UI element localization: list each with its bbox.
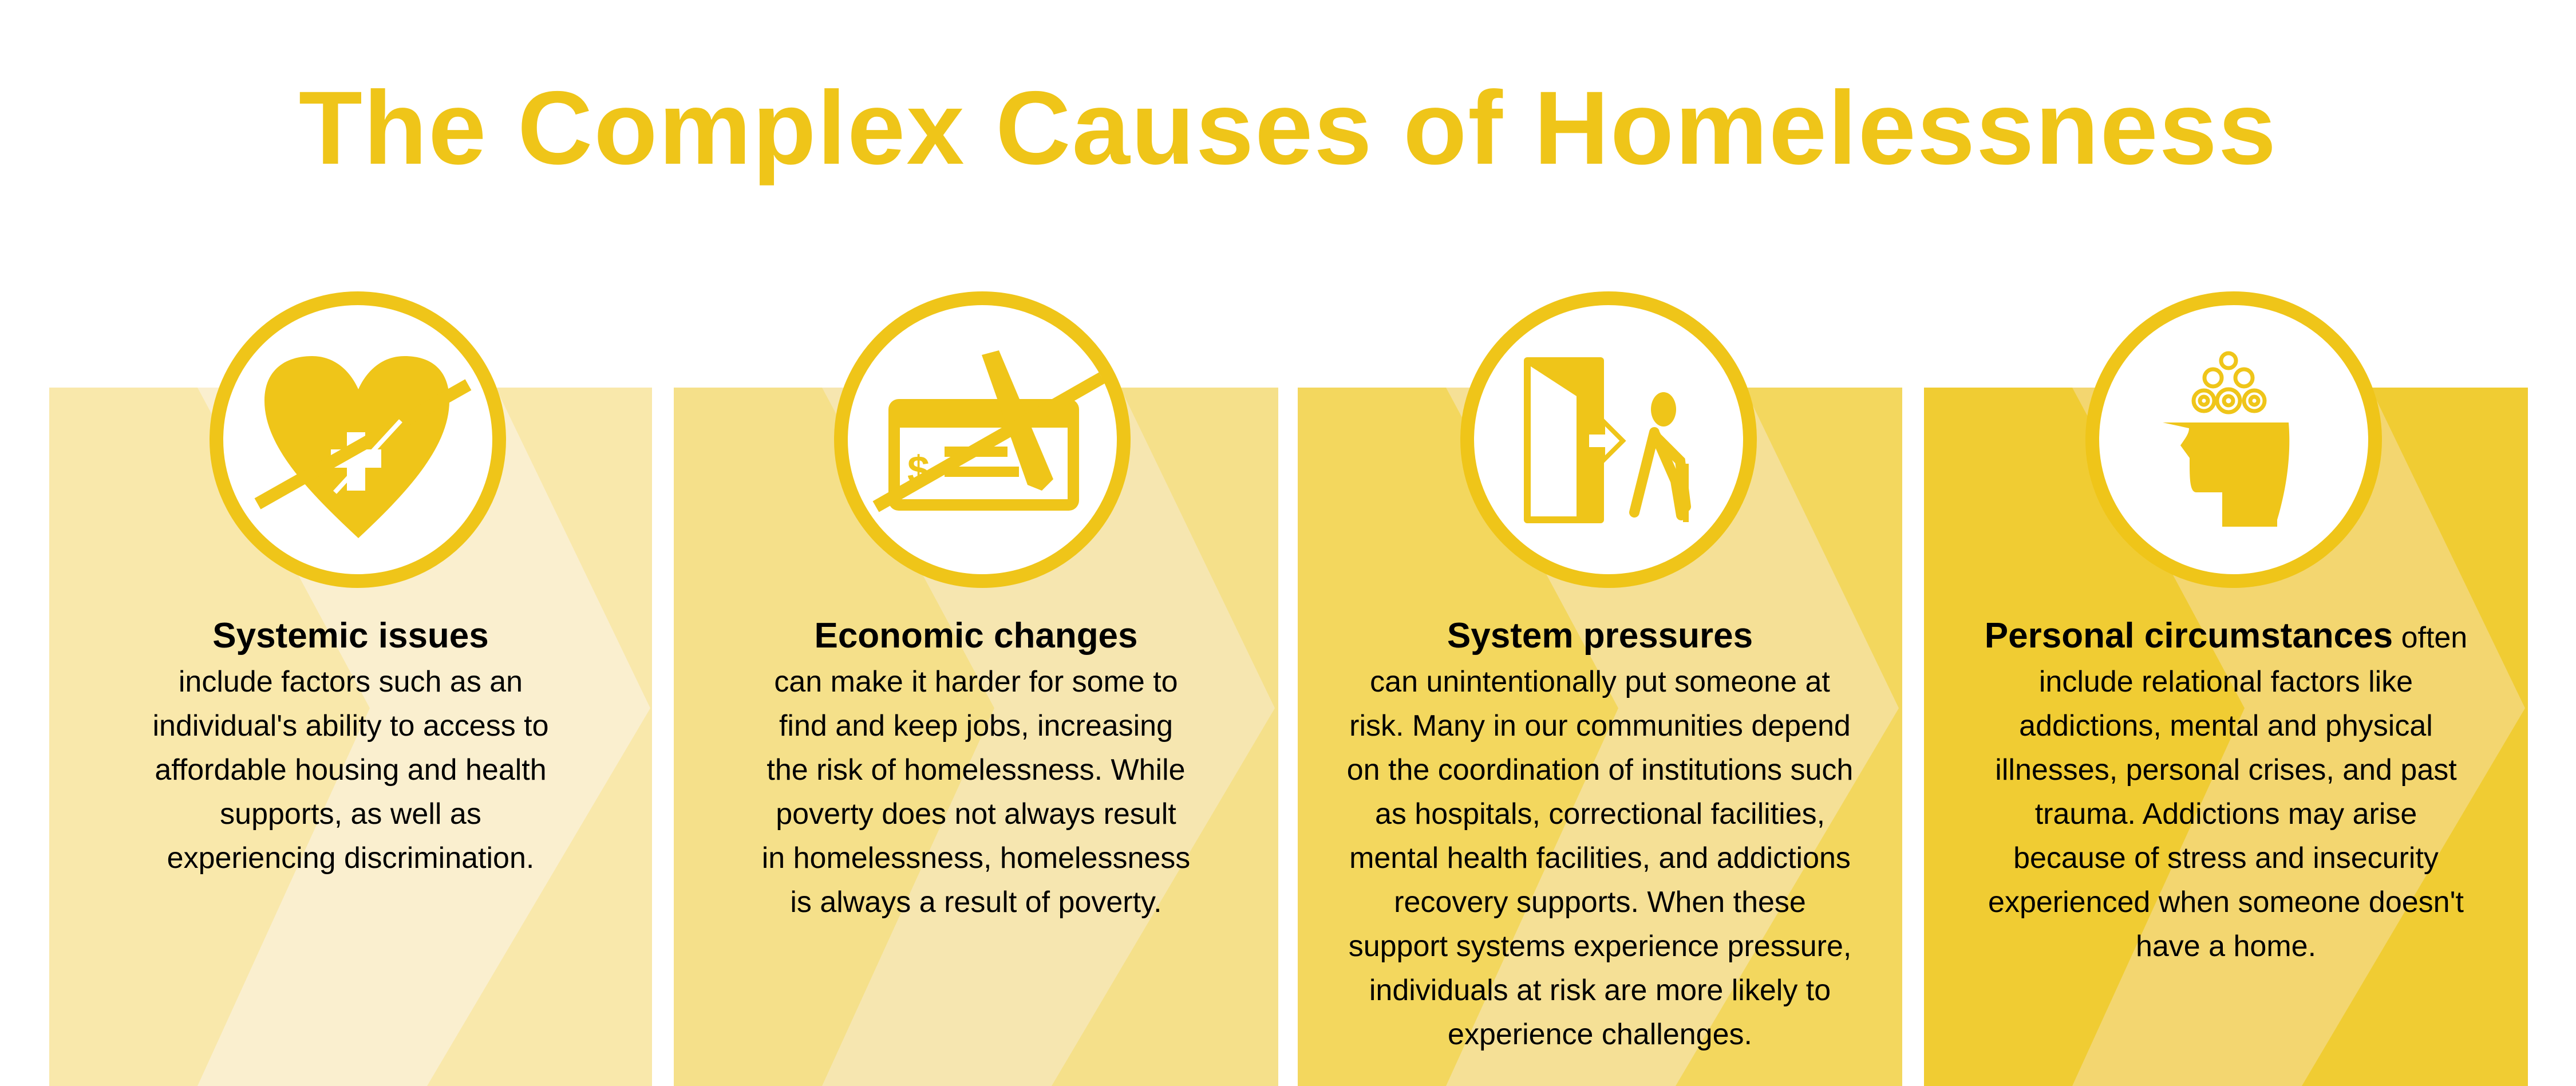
text: systemic issues: experiencing discrimination. — [167, 842, 534, 875]
text: economic changes: is always a result of poverty. — [790, 886, 1162, 919]
text: personal circumstances: illnesses, personal crises, and past — [1995, 753, 2457, 787]
text: systemic issues: supports, as well as — [220, 797, 481, 831]
panel: economic changes — [674, 388, 1278, 1086]
icon: door and person exiting — [1467, 298, 1750, 581]
text: personal circumstances: experienced when someone doesn't — [1988, 886, 2464, 919]
text: system pressures: System pressures — [1447, 616, 1753, 655]
text: system pressures: risk. Many in our communities depend — [1349, 709, 1851, 743]
text: systemic issues: individual's ability to access to — [152, 709, 549, 743]
text: systemic issues: Systemic issues — [212, 616, 489, 655]
text: personal circumstances: because of stress and insecurity — [2013, 842, 2439, 875]
text: economic changes: Economic changes — [814, 616, 1138, 655]
icon: cheque with pen and slash — [841, 298, 1124, 581]
text: economic changes: find and keep jobs, increasing — [779, 709, 1173, 743]
text: system pressures: can unintentionally put someone at — [1370, 665, 1830, 698]
icon: head with swirls — [2092, 298, 2375, 581]
text: system pressures — [1347, 616, 1853, 1051]
text: system pressures: as hospitals, correctional facilities, — [1375, 797, 1825, 831]
text: economic changes: poverty does not always result — [776, 797, 1176, 831]
panel: personal circumstances — [1924, 388, 2528, 1086]
panel: system pressures — [1298, 388, 1902, 1086]
text: economic changes: in homelessness, homelessness — [762, 842, 1190, 875]
text: systemic issues: include factors such as an — [179, 665, 523, 698]
text: economic changes: can make it harder for some to — [774, 665, 1178, 698]
text: system pressures: recovery supports. When these — [1394, 886, 1806, 919]
text: personal circumstances: include relational factors like — [2039, 665, 2413, 698]
text: economic changes: the risk of homelessness. While — [767, 753, 1186, 787]
icon: heart with slash — [216, 298, 499, 581]
text: system pressures: individuals at risk are more likely to — [1369, 974, 1831, 1007]
text: system pressures: on the coordination of institutions such — [1347, 753, 1853, 787]
text: personal circumstances: Personal circumstances often — [1985, 616, 2467, 655]
text: system pressures: experience challenges. — [1448, 1018, 1752, 1051]
text: personal circumstances: have a home. — [2136, 930, 2316, 963]
text: systemic issues: affordable housing and health — [155, 753, 547, 787]
text: personal circumstances: addictions, mental and physical — [2019, 709, 2433, 743]
text: systemic issues — [152, 616, 549, 875]
text: economic changes — [762, 616, 1190, 919]
text: personal circumstances: trauma. Addictions may arise — [2035, 797, 2417, 831]
text: system pressures: mental health facilities, and addictions — [1349, 842, 1851, 875]
text: system pressures: support systems experience pressure, — [1349, 930, 1851, 963]
icon: cheque with pen and slash: $ — [907, 448, 930, 492]
panel: systemic issues — [49, 388, 652, 1086]
title: The Complex Causes of Homelessness — [299, 69, 2277, 186]
text: personal circumstances — [1985, 616, 2467, 963]
